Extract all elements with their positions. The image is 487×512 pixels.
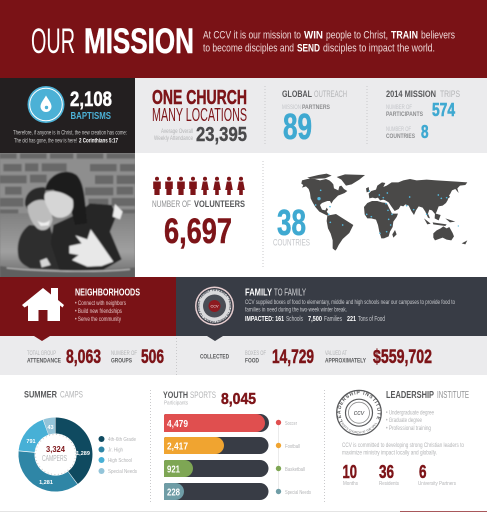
leadership stats: [342, 462, 456, 487]
baptisms label: BAPTISMS: [70, 111, 111, 122]
title: MISSION: [84, 22, 194, 61]
title: OUR: [31, 22, 75, 61]
family description: [245, 300, 455, 314]
bar chart: 4,479: [167, 419, 188, 430]
panel: collected stats strip: [0, 336, 487, 375]
youth sports heading: SPORTS: [190, 390, 216, 401]
countries count: 38: [277, 202, 306, 243]
summer camps heading: SUMMER: [24, 390, 57, 400]
photo: baptism embrace: [0, 152, 135, 284]
woman: [51, 203, 122, 272]
sports legend: Football: [285, 444, 300, 450]
verse: The old has gone, the new is here!: [14, 138, 77, 144]
sports legend: Soccer: [285, 421, 297, 427]
2014 mission trips: NUMBER OF: [386, 105, 412, 111]
leadership list: • Graduate degree: [386, 418, 422, 424]
family heading: TO FAMILY: [274, 288, 306, 299]
family description: families in need during the two-week winter break.: [245, 308, 347, 314]
volunteers label: NUMBER OF: [152, 199, 191, 209]
number of groups: 506: [141, 347, 164, 368]
number of groups: [111, 347, 164, 368]
verse: Therefore, if anyone is in Christ, the new creation has come:: [13, 130, 127, 136]
baptisms count: 2,108: [70, 88, 112, 111]
leadership stats: Months: [343, 481, 358, 487]
icons: volunteer figures: [153, 177, 245, 195]
food value: $559,702: [373, 347, 432, 368]
bar chart: [164, 414, 269, 500]
global outreach: GLOBAL: [282, 89, 312, 100]
2014 mission trips: [386, 89, 460, 142]
family impact: IMPACTED: 161: [245, 316, 284, 323]
donut chart: 43: [47, 425, 54, 431]
number of groups: GROUPS: [111, 358, 132, 364]
youth sports heading: Participants: [164, 400, 188, 406]
neighborhoods heading: NEIGHBORHOODS: [75, 288, 140, 299]
family impact: Tons of Food: [358, 316, 385, 323]
family impact: 7,500: [308, 316, 322, 323]
2014 mission trips: 8: [421, 122, 428, 142]
family heading: FAMILY: [245, 288, 272, 299]
boxes of food: [245, 347, 314, 368]
leadership description: [342, 443, 465, 456]
donut chart: [18, 418, 92, 492]
donut legend: Jr. High: [108, 448, 123, 454]
boxes of food: FOOD: [245, 358, 259, 364]
global outreach: 89: [283, 106, 312, 147]
neighborhoods list: • Build new friendships: [75, 309, 122, 315]
sports legend: [276, 420, 311, 496]
mission statement: TRAIN: [391, 30, 418, 42]
global outreach: OUTREACH: [314, 89, 347, 100]
number of groups: NUMBER OF: [111, 351, 137, 357]
donut legend: High School: [108, 458, 132, 464]
icon: leadership seal: CHRIST'S CHURCH OF THE VALLEY: [341, 422, 377, 434]
icon: house: [22, 288, 64, 321]
mission statement: believers: [421, 30, 455, 42]
leadership list: [386, 410, 434, 432]
leadership list: • Undergraduate degree: [386, 410, 434, 416]
2014 mission trips: 574: [432, 100, 455, 120]
food value: APPROXIMATELY: [325, 358, 366, 364]
one church many locations: Weekly Attendance: [154, 136, 193, 142]
donut chart: 3,324: [46, 445, 66, 454]
leadership list: • Professional training: [386, 426, 431, 432]
food value: [325, 347, 432, 368]
group attendance: [27, 347, 101, 368]
collected label: COLLECTED: [200, 354, 229, 360]
leadership heading: LEADERSHIP: [386, 390, 434, 401]
global outreach: [282, 89, 347, 147]
leadership description: maximize ministry impact locally and globally.: [342, 450, 437, 456]
mission statement: At CCV it is our mission to: [203, 30, 301, 42]
sports legend: Basketball: [285, 467, 305, 473]
2014 mission trips: PARTICIPANTS: [386, 111, 424, 118]
2014 mission trips: 2014 MISSION: [386, 89, 436, 100]
panel: volunteers: [152, 177, 245, 251]
donut legend: 4th-6th Grade: [108, 437, 136, 443]
boxes of food: 14,729: [272, 347, 314, 368]
panel: baptisms: [0, 78, 135, 153]
neighborhoods list: [75, 301, 126, 323]
food value: VALUED AT: [325, 351, 347, 357]
mission statement: WIN: [304, 30, 323, 42]
icon: family seal: [195, 286, 234, 326]
youth sports heading: YOUTH: [163, 390, 188, 401]
youth sports heading: 8,045: [221, 391, 256, 408]
icon: leadership seal: LEADERSHIP INSTITUTE: [337, 391, 381, 422]
leadership stats: 6: [419, 462, 426, 482]
leadership stats: 10: [342, 462, 357, 482]
icon: family seal: FAMILY TO FAMILY · FAMILY TO FAMILY · FAMILY TO FAMILY · FAMILY TO: [198, 289, 232, 323]
youth sports heading: [163, 390, 256, 408]
neighborhoods list: • Serve the community: [75, 317, 121, 323]
verse: [13, 130, 127, 144]
mission statement: disciples to impact the world.: [323, 42, 435, 54]
bar chart: 228: [167, 488, 180, 498]
global outreach: PARTNERS: [302, 104, 331, 111]
group attendance: TOTAL GROUP: [27, 351, 56, 357]
countries count: COUNTRIES: [273, 238, 310, 248]
countries count: [273, 202, 310, 248]
family heading: [245, 288, 306, 299]
header banner: [0, 0, 487, 78]
donut chart: CAMPERS: [42, 454, 67, 463]
mission statement: [203, 30, 455, 54]
family impact: Families: [324, 316, 342, 323]
family impact: Schools: [286, 316, 303, 323]
2014 mission trips: TRIPS: [440, 89, 460, 100]
bar chart: 921: [167, 464, 180, 476]
one church many locations: [152, 87, 247, 146]
volunteers label: [152, 199, 245, 209]
man: [18, 225, 62, 270]
bar chart: 2,417: [167, 442, 188, 452]
icon: water drop: [28, 86, 64, 123]
donut chart: 1,281: [39, 480, 53, 486]
mission statement: to become disciples and: [203, 42, 294, 54]
family impact: [245, 316, 385, 323]
family impact: 221: [347, 316, 356, 323]
group attendance: ATTENDANCE: [27, 358, 62, 364]
volunteers count: 6,697: [164, 212, 232, 251]
donut chart: 791: [26, 439, 36, 445]
neighborhoods list: • Connect with neighbors: [75, 301, 126, 307]
icon: leadership seal: ccv: [354, 410, 365, 417]
2014 mission trips: COUNTRIES: [386, 133, 416, 140]
leadership stats: University Partners: [418, 481, 456, 487]
world map: [301, 174, 467, 251]
title: [31, 22, 194, 61]
leadership stats: 36: [379, 462, 394, 482]
group attendance: 8,063: [66, 347, 101, 368]
panel: summer camps: [18, 390, 137, 492]
leadership stats: Residents: [379, 481, 399, 487]
boxes of food: BOXES OF: [245, 351, 266, 357]
one church many locations: 23,395: [196, 124, 247, 146]
panel: family to family: [176, 277, 487, 336]
icon: family seal: CCV: [210, 304, 219, 308]
panel: stats strip: [135, 78, 487, 153]
2014 mission trips: NUMBER OF: [386, 127, 411, 133]
panel: youth sports: [163, 390, 311, 500]
mission statement: people to Christ,: [326, 30, 388, 42]
global outreach: MISSION: [282, 104, 301, 111]
donut chart: 1,289: [76, 451, 90, 457]
donut legend: [98, 436, 137, 475]
icon: leadership seal: [336, 390, 382, 436]
one church many locations: ONE CHURCH: [152, 87, 247, 109]
mission statement: SEND: [297, 42, 320, 54]
panel: neighborhoods: [0, 277, 176, 336]
donut legend: Special Needs: [108, 469, 137, 475]
verse: 2 Corinthians 5:17: [79, 138, 118, 144]
sports legend: Special Needs: [285, 490, 311, 496]
volunteers label: VOLUNTEERS: [194, 199, 245, 209]
summer camps heading: CAMPS: [60, 390, 83, 400]
one church many locations: MANY LOCATIONS: [152, 105, 247, 125]
one church many locations: Average Overall: [161, 129, 193, 135]
